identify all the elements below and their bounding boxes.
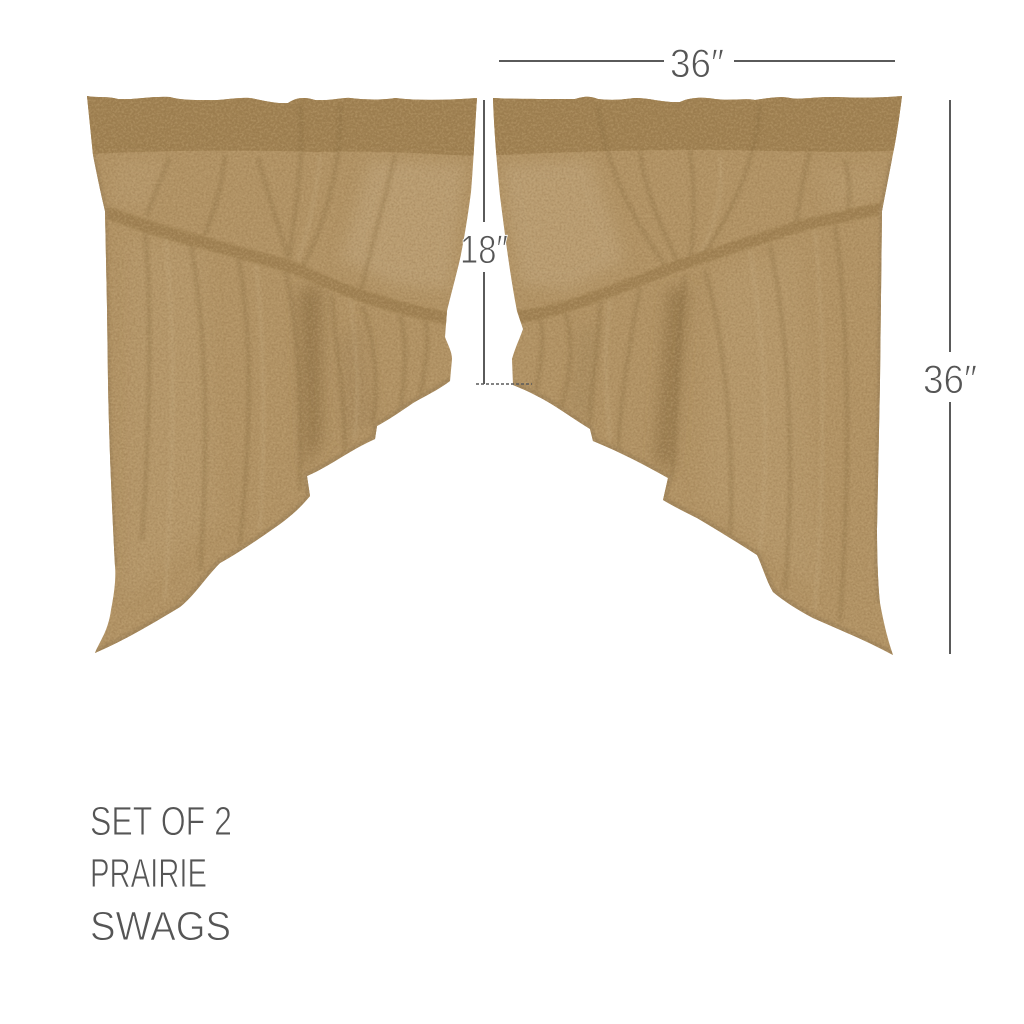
product title: SWAGS	[90, 903, 231, 949]
center drop dimension: 18 inches: 18″	[460, 228, 508, 272]
left curtain header band	[87, 96, 477, 156]
product title: PRAIRIE	[90, 850, 207, 896]
product title	[90, 798, 232, 949]
side length dimension: 36 inches: 36″	[923, 358, 977, 402]
left curtain panel	[80, 90, 480, 660]
product title: SET OF 2	[90, 798, 232, 844]
right curtain header band	[493, 96, 902, 155]
top width dimension: 36 inches: 36″	[670, 42, 724, 86]
right curtain panel	[488, 90, 908, 660]
right curtain gather belt	[517, 202, 884, 323]
left curtain gather belt	[104, 205, 449, 325]
